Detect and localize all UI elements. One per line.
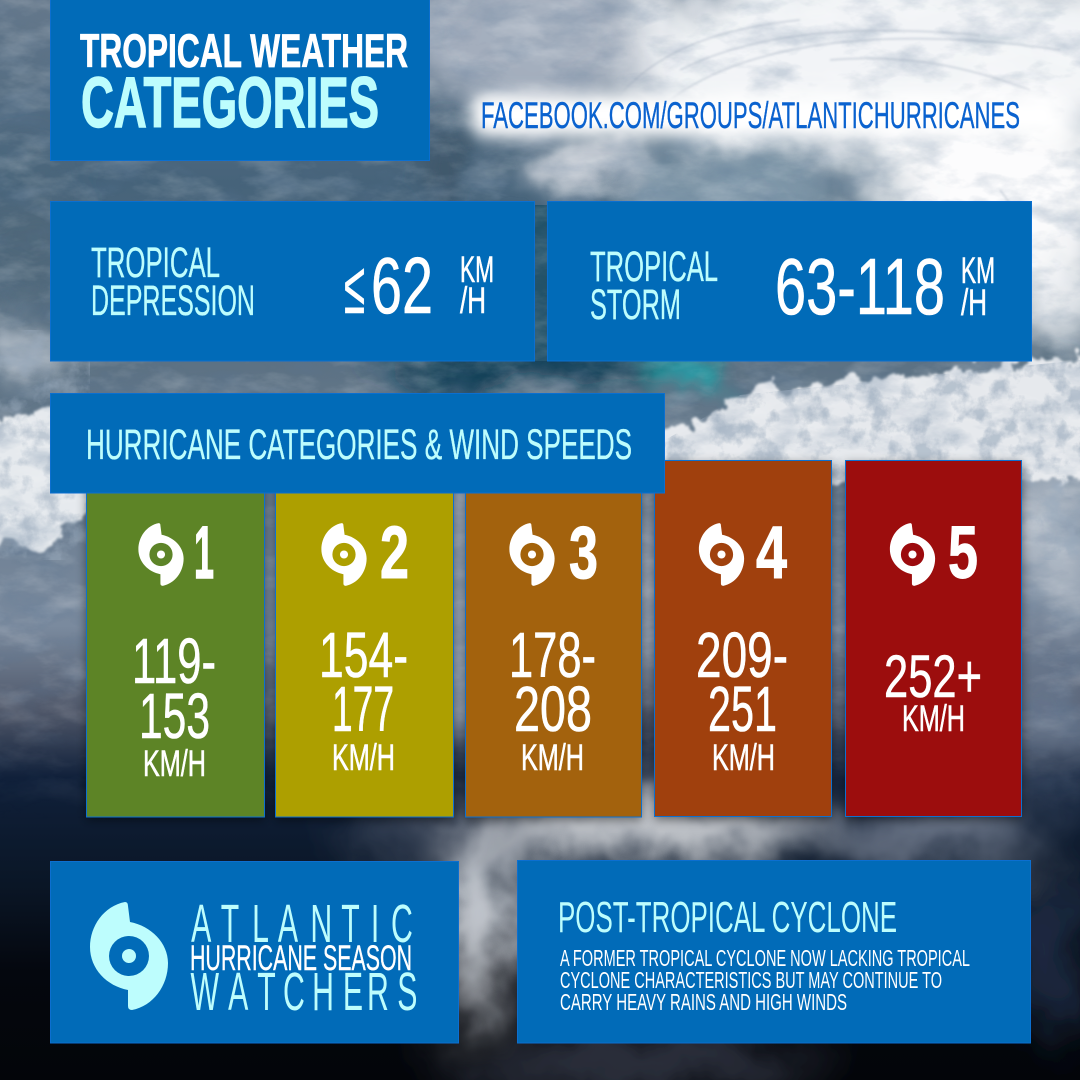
card: category 1 — [86, 480, 264, 817]
panel: atlantic hurricane season watchers logo — [50, 862, 458, 1043]
swirl cloud bands — [600, 20, 1060, 260]
card: category 3 — [466, 480, 642, 817]
title line: tropical weather: TROPICAL WEATHER — [80, 24, 408, 77]
category number: 2 — [380, 511, 409, 594]
panel: post-tropical cyclone — [518, 860, 1030, 1043]
label: tropical storm — [590, 243, 718, 329]
wind speed range — [132, 625, 216, 784]
wind speed range — [884, 643, 982, 739]
wind speed range — [696, 619, 788, 778]
label: tropical depression: DEPRESSION — [91, 277, 255, 325]
icon: hurricane symbol — [890, 523, 935, 586]
wind speed range: 252+ — [884, 643, 982, 710]
logo wordmark: ATLANTIC — [191, 894, 413, 954]
label: tropical depression: TROPICAL — [91, 239, 220, 287]
label: tropical storm: STORM — [590, 281, 681, 329]
icon: hurricane symbol — [321, 523, 367, 586]
wind speed range — [509, 619, 596, 778]
wind speed: at most 62 km/h: 62 — [371, 241, 433, 330]
wind speed: 63-118 km/h: 63-118 — [775, 242, 945, 331]
logo wordmark: HURRICANE SEASON — [190, 939, 412, 978]
wind speed range: 177 — [332, 673, 394, 745]
card: category 2 — [276, 480, 454, 817]
panel: tropical storm — [548, 202, 1032, 361]
category number: 4 — [756, 511, 787, 594]
wind speed range: 178- — [509, 619, 596, 691]
heading: hurricane categories and wind speeds: HURRICANE CATEGORIES & WIND SPEEDS — [86, 421, 632, 469]
wind speed range: KM/H — [902, 698, 965, 739]
icon: hurricane symbol — [138, 523, 184, 586]
icon: hurricane symbol — [509, 523, 555, 586]
wind speed range: 154- — [319, 619, 408, 691]
label: tropical depression — [91, 239, 255, 325]
icon: hurricane logo — [90, 902, 168, 1010]
logo wordmark: WATCHERS — [191, 962, 417, 1022]
wind speed range: KM/H — [143, 743, 206, 784]
wind speed range: 208 — [514, 673, 592, 745]
card: category 4 — [654, 460, 832, 816]
wind speed range: 153 — [139, 680, 210, 752]
wind speed: at most 62 km/h — [344, 241, 494, 330]
wind speed range — [319, 619, 408, 778]
panel: tropical depression — [50, 202, 534, 361]
wind speed: at most 62 km/h: /H — [460, 280, 486, 321]
wind speed range: KM/H — [712, 737, 775, 778]
category number: 5 — [948, 511, 978, 594]
card: category 1: 1 — [194, 511, 214, 594]
icon: hurricane symbol — [699, 523, 744, 586]
wind speed: 63-118 km/h: /H — [961, 282, 987, 323]
panel: title — [50, 0, 430, 160]
description text: CARRY HEAVY RAINS AND HIGH WINDS — [560, 989, 847, 1015]
logo wordmark — [190, 894, 417, 1022]
clouds: fluffy white masses — [0, 355, 1080, 545]
wind speed: at most 62 km/h: KM — [460, 249, 494, 290]
wind speed range: 209- — [696, 619, 788, 691]
wind speed range: KM/H — [521, 737, 584, 778]
wind speed range: 251 — [708, 673, 777, 745]
label: tropical storm: TROPICAL — [590, 243, 718, 291]
wind speed range: KM/H — [332, 737, 395, 778]
wind speed: 63-118 km/h: KM — [961, 250, 995, 291]
category number: 3 — [569, 511, 598, 594]
wind speed range: 119- — [132, 625, 216, 697]
card: category 5 — [846, 460, 1022, 816]
panel: hurricane categories header — [50, 394, 664, 493]
title line: categories: CATEGORIES — [81, 64, 379, 143]
wind speed: at most 62 km/h: ≤ — [344, 246, 365, 329]
description text — [560, 945, 970, 1015]
